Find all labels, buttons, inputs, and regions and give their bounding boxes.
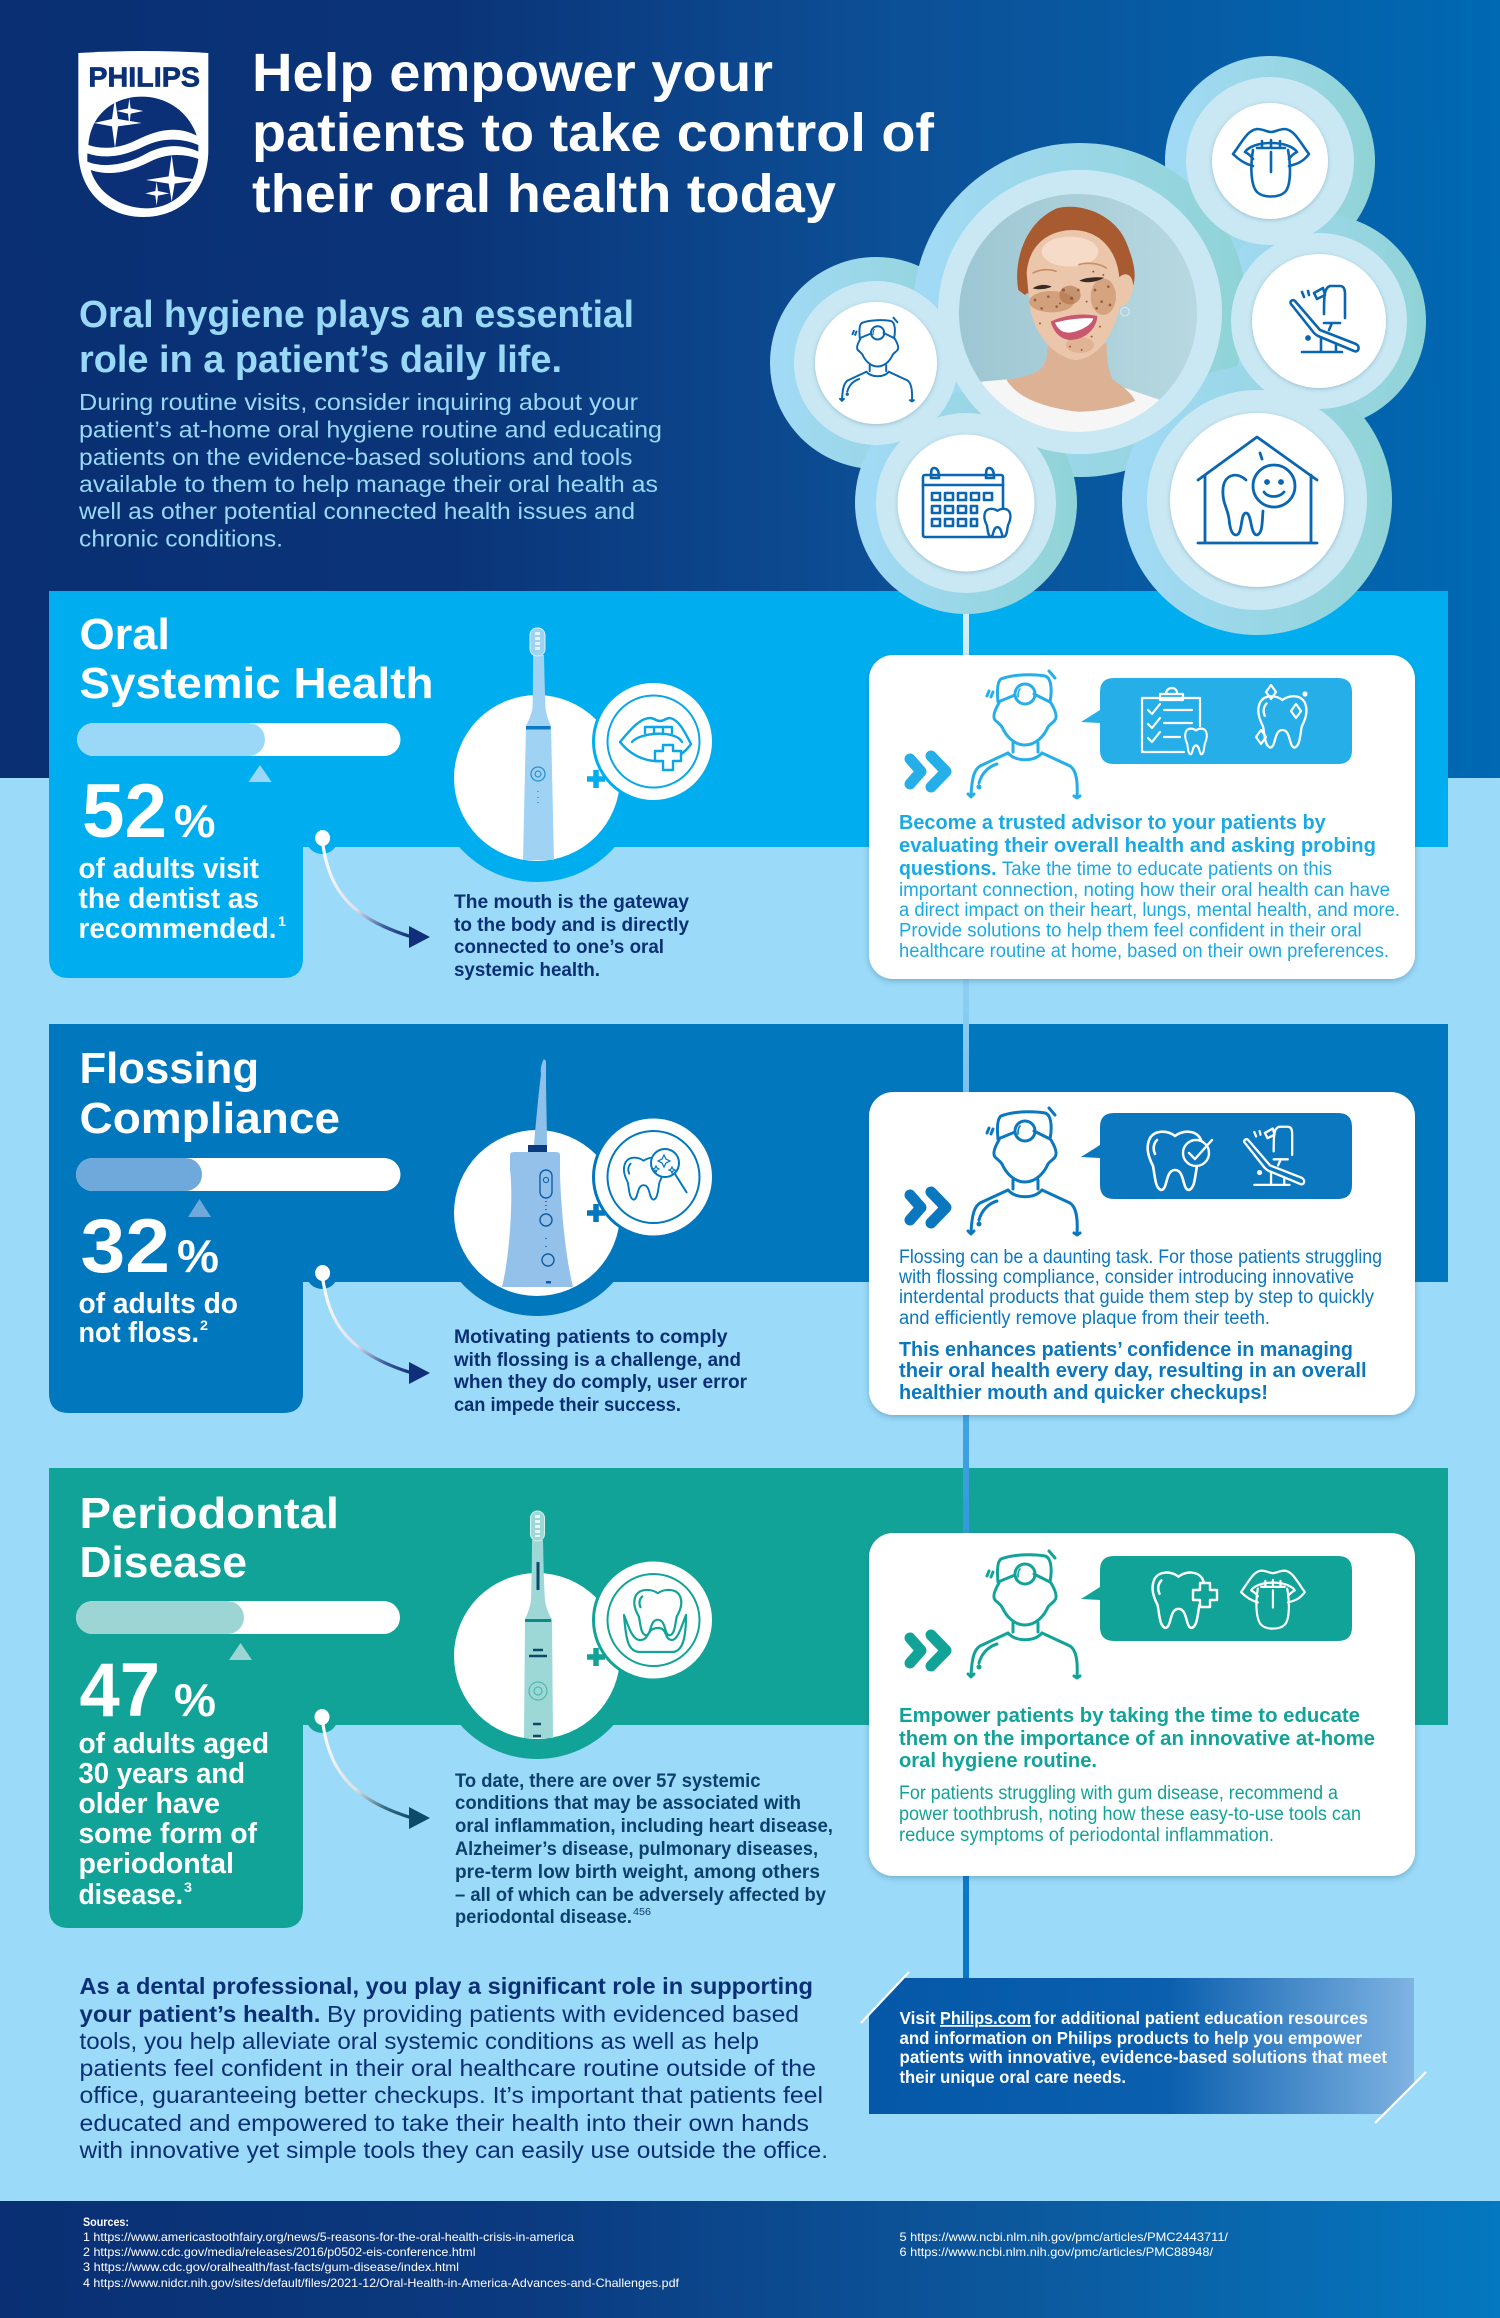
heading: periodontal disease xyxy=(80,1489,339,1587)
icon: mouth and tongue xyxy=(1233,129,1309,196)
icon cluster: bubbles with patient photo xyxy=(770,56,1426,635)
card text: Empower patients by taking the time to educate xyxy=(899,1705,1360,1727)
description text: to the body and is directly xyxy=(454,914,689,936)
stat: 47 percent xyxy=(80,1648,216,1733)
card text: important connection, noting how their oral health can have xyxy=(899,880,1390,901)
card text: their oral health every day, resulting in an overall xyxy=(899,1360,1367,1382)
description text: To date, there are over 57 systemic xyxy=(455,1770,761,1792)
progress bar 47 percent xyxy=(76,1601,400,1660)
description text: periodontal disease. xyxy=(455,1906,632,1928)
closing paragraph: patients feel confident in their oral healthcare routine outside of the xyxy=(80,2055,816,2081)
description text xyxy=(454,891,689,981)
description text: oral inflammation, including heart disease, xyxy=(455,1815,833,1837)
card text: questions. xyxy=(899,858,997,880)
description text: when they do comply, user error xyxy=(453,1371,747,1393)
card text: evaluating their overall health and asking probing xyxy=(899,835,1376,857)
sources: 3 https://www.cdc.gov/oralhealth/fast-facts/gum-disease/index.html xyxy=(83,2260,459,2274)
description text: can impede their success. xyxy=(454,1394,681,1416)
description text xyxy=(455,1770,833,1928)
title xyxy=(252,43,935,224)
card text xyxy=(899,1705,1375,1846)
stat description: of adults do xyxy=(78,1288,238,1320)
stat description: disease. xyxy=(78,1879,183,1911)
sources: 5 https://www.ncbi.nlm.nih.gov/pmc/articles/PMC2443711/ xyxy=(900,2230,1229,2244)
stat description: 2 xyxy=(200,1317,208,1333)
panel: flossing compliance background xyxy=(49,1024,1448,1413)
closing paragraph: with innovative yet simple tools they can easily use outside the office. xyxy=(78,2137,828,2163)
description text: pre-term low birth weight, among others xyxy=(455,1861,820,1883)
icon: dentist xyxy=(968,671,1080,798)
water flosser with tooth icon xyxy=(454,1059,714,1296)
progress bar 32 percent xyxy=(76,1158,400,1217)
stat: 47 percent: 47 xyxy=(80,1648,160,1733)
speech bubble with tooth and chair icons xyxy=(1081,1113,1352,1199)
intro body text: patients on the evidence-based solutions and tools xyxy=(79,444,632,470)
card text: interdental products that guide them step by step to quickly xyxy=(899,1287,1374,1308)
heading: flossing compliance: Compliance xyxy=(80,1094,340,1143)
card text: Provide solutions to help them feel confident in their oral xyxy=(899,920,1362,942)
description text: connected to one’s oral xyxy=(454,936,664,958)
card text: power toothbrush, noting how these easy-to-use tools can xyxy=(899,1804,1361,1825)
stat: 52 percent xyxy=(82,769,216,854)
stat: 32 percent: 32 xyxy=(80,1204,170,1289)
stat description xyxy=(78,1728,269,1911)
sources: 1 https://www.americastoothfairy.org/news/5-reasons-for-the-oral-health-crisis-in-america xyxy=(83,2230,574,2244)
icon: dentist xyxy=(968,1108,1080,1235)
card text: them on the importance of an innovative at-home xyxy=(899,1728,1375,1750)
progress bar 52 percent xyxy=(77,723,400,782)
footer background xyxy=(0,2201,1500,2318)
intro body text: chronic conditions. xyxy=(79,526,283,552)
card text: oral hygiene routine. xyxy=(899,1750,1097,1772)
stat description: some form of xyxy=(78,1818,257,1850)
card text: with flossing compliance, consider introducing innovative xyxy=(898,1267,1354,1288)
description text: Alzheimer’s disease, pulmonary diseases, xyxy=(455,1838,818,1860)
card: flossing advice xyxy=(869,1092,1415,1415)
intro body text: During routine visits, consider inquiring about your xyxy=(79,389,638,415)
card text: This enhances patients’ confidence in managing xyxy=(899,1339,1353,1361)
intro heading: Oral hygiene plays an essential xyxy=(79,294,634,336)
panel content: periodontal disease stats xyxy=(76,1489,833,1928)
title: patients to take control of xyxy=(252,103,935,163)
icon: dentist xyxy=(968,1551,1080,1678)
card text: reduce symptoms of periodontal inflammation. xyxy=(899,1825,1274,1846)
panel content: oral systemic health stats xyxy=(77,610,714,981)
toothbrush with gum icon xyxy=(454,1511,714,1739)
arrow xyxy=(315,1265,430,1384)
logo: Philips shield xyxy=(78,51,208,217)
stat description: of adults visit xyxy=(78,853,259,885)
sources: 2 https://www.cdc.gov/media/releases/2016/p0502-eis-conference.html xyxy=(83,2245,476,2259)
stat description: recommended. xyxy=(78,913,276,945)
stat: 52 percent: 52 xyxy=(82,769,167,854)
card text: Become a trusted advisor to your patients by xyxy=(899,812,1327,834)
arrow xyxy=(315,830,430,948)
connector line xyxy=(963,613,969,1979)
panel: periodontal disease background xyxy=(49,1468,1448,1928)
closing paragraph: As a dental professional, you play a significant role in supporting xyxy=(80,1973,813,1999)
closing paragraph: office, guaranteeing better checkups. It’s important that patients feel xyxy=(80,2082,823,2108)
stat description: periodontal xyxy=(78,1848,234,1880)
card: trusted advisor xyxy=(869,655,1415,979)
card text: healthcare routine at home, based on their own preferences. xyxy=(899,941,1389,962)
speech bubble with clipboard and tooth icons xyxy=(1081,678,1352,764)
heading: oral systemic health: Systemic Health xyxy=(80,659,434,708)
stat: 32 percent: % xyxy=(177,1230,219,1282)
intro body text: available to them to help manage their oral health as xyxy=(79,471,658,497)
heading: flossing compliance: Flossing xyxy=(80,1044,259,1093)
closing paragraph: your patient’s health. xyxy=(80,2001,320,2027)
card text: For patients struggling with gum disease, recommend a xyxy=(899,1783,1338,1804)
stat: 52 percent: % xyxy=(174,795,216,847)
sources: 4 https://www.nidcr.nih.gov/sites/default/files/2021-12/Oral-Health-in-America-Advances-and-Challenges.pdf xyxy=(83,2276,680,2290)
intro heading xyxy=(79,294,634,381)
arrow xyxy=(314,1709,430,1829)
icon: dentist xyxy=(840,318,914,401)
stat description: 3 xyxy=(184,1879,192,1895)
sources: 6 https://www.ncbi.nlm.nih.gov/pmc/articles/PMC88948/ xyxy=(900,2245,1214,2259)
description text: 456 xyxy=(633,1907,651,1918)
card text: Flossing can be a daunting task. For those patients struggling xyxy=(899,1247,1382,1268)
logo: Philips shield: PHILIPS xyxy=(88,62,200,93)
header background xyxy=(0,0,1500,778)
description text xyxy=(453,1326,747,1416)
callout: visit Philips.com: their unique oral care needs. xyxy=(900,2067,1126,2087)
description text: – all of which can be adversely affected by xyxy=(455,1884,826,1906)
description text: conditions that may be associated with xyxy=(455,1792,801,1814)
description text: systemic health. xyxy=(454,959,600,981)
title: their oral health today xyxy=(252,164,836,224)
panel: oral systemic health background xyxy=(49,591,1448,978)
callout: visit Philips.com: and information on Philips products to help you empower xyxy=(900,2028,1362,2048)
closing paragraph: educated and empowered to take their health into their own hands xyxy=(80,2110,809,2136)
intro body text: patient’s at-home oral hygiene routine and educating xyxy=(79,416,662,442)
heading: periodontal disease: Disease xyxy=(80,1538,247,1587)
description text: with flossing is a challenge, and xyxy=(453,1349,741,1371)
heading: periodontal disease: Periodontal xyxy=(80,1489,339,1538)
stat description xyxy=(78,853,286,945)
description text: Motivating patients to comply xyxy=(454,1326,728,1348)
photo: smiling patient xyxy=(959,194,1197,432)
heading: oral systemic health xyxy=(80,610,434,708)
stat description: 30 years and xyxy=(78,1758,245,1790)
callout: visit Philips.com: Philips.com xyxy=(940,2008,1031,2028)
callout: visit Philips.com xyxy=(861,1972,1426,2123)
stat: 32 percent xyxy=(80,1204,219,1289)
stat description: of adults aged xyxy=(78,1728,269,1760)
heading: oral systemic health: Oral xyxy=(80,610,170,659)
card: empower patients xyxy=(869,1533,1415,1876)
stat description: not floss. xyxy=(78,1317,199,1349)
stat description: 1 xyxy=(278,913,286,929)
card text: healthier mouth and quicker checkups! xyxy=(899,1382,1268,1404)
description text: The mouth is the gateway xyxy=(454,891,689,913)
card text: a direct impact on their heart, lungs, mental health, and more. xyxy=(899,900,1400,921)
icon: dental chair xyxy=(1290,286,1359,352)
callout: visit Philips.com: Visit xyxy=(900,2008,936,2028)
closing paragraph xyxy=(78,1973,828,2163)
callout: visit Philips.com: for additional patient education resources xyxy=(1034,2008,1368,2028)
sources xyxy=(83,2215,1229,2290)
speech bubble with tooth and tongue icons xyxy=(1081,1556,1352,1641)
card text xyxy=(899,812,1400,962)
card text xyxy=(898,1247,1382,1404)
closing paragraph: tools, you help alleviate oral systemic conditions as well as help xyxy=(80,2028,759,2054)
stat description xyxy=(78,1288,238,1349)
intro body text: well as other potential connected health issues and xyxy=(78,498,635,524)
icon: house with smiling tooth xyxy=(1198,437,1317,543)
intro heading: role in a patient’s daily life. xyxy=(79,339,562,381)
intro body text xyxy=(78,389,662,552)
icon: chevrons xyxy=(910,756,946,787)
card text: and efficiently remove plaque from their teeth. xyxy=(899,1308,1270,1329)
callout: visit Philips.com: patients with innovative, evidence-based solutions that meet xyxy=(900,2047,1387,2067)
stat description: the dentist as xyxy=(78,883,259,915)
panel content: flossing compliance stats xyxy=(76,1044,747,1416)
icon: chevrons xyxy=(910,1192,946,1223)
closing paragraph: By providing patients with evidenced based xyxy=(327,2001,799,2027)
sources: Sources: xyxy=(83,2215,129,2229)
card text: Take the time to educate patients on this xyxy=(1002,859,1332,880)
icon: calendar and tooth xyxy=(923,468,1011,537)
heading: flossing compliance xyxy=(80,1044,340,1143)
icon: chevrons xyxy=(910,1635,946,1666)
stat: 47 percent: % xyxy=(174,1674,216,1726)
stat description: older have xyxy=(78,1788,220,1820)
toothbrush with mouth icon xyxy=(454,628,714,861)
title: Help empower your xyxy=(252,43,773,103)
